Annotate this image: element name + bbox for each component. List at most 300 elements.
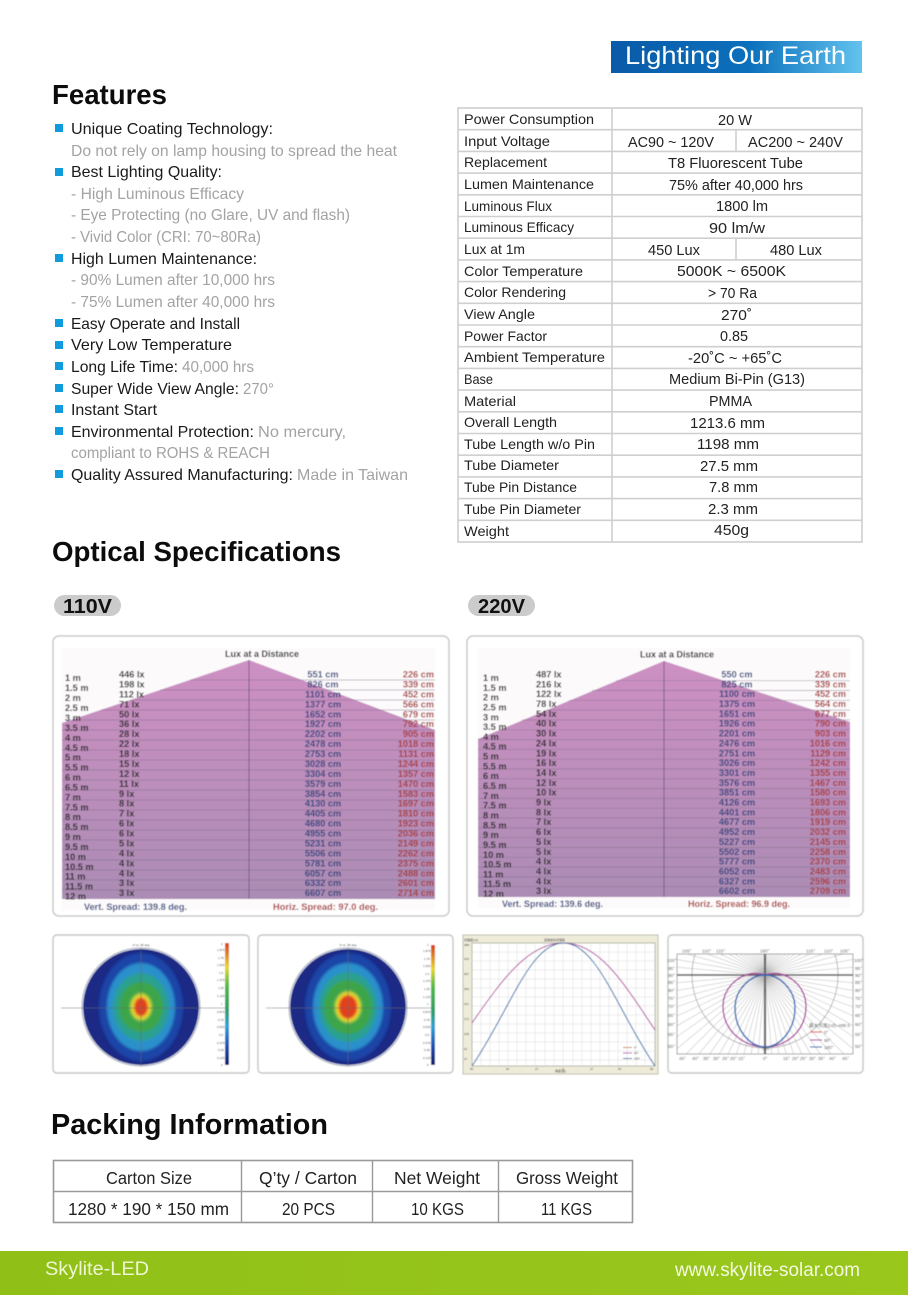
panel: 220V lux at a distance chart: 564 cm [815,699,846,709]
panel: 110V false-colour illuminance map: 0.75 [218,1018,224,1022]
table values: 27.5 mm [700,458,758,475]
table row labels: Input Voltage [464,133,550,149]
table values: 5000K ~ 6500K [677,263,786,280]
panel: 110V lux at a distance chart: 1357 cm [398,769,434,779]
panel: 110V lux at a distance chart: 12 m [65,892,86,902]
chart: polar light distribution diagram: 45° [679,1056,686,1061]
panel: 110V false-colour illuminance map: 1.375 [217,978,225,982]
table row labels: Power Consumption [464,111,594,127]
panel: 110V lux at a distance chart: 2714 cm [398,888,434,898]
chart: luminous intensity vs angle line chart: 51 [464,1047,468,1051]
panel: 220V lux at a distance chart: 1355 cm [810,768,846,778]
panel: 220V lux at a distance chart: 3.5 m [483,722,506,732]
panel: 220V lux at a distance chart: 5227 cm [719,837,755,847]
panel: features list: Made in Taiwan [297,467,408,484]
table values: Medium Bi-Pin (G13) [669,371,805,388]
panel: 110V lux at a distance chart: 3854 cm [305,789,341,799]
chart: polar light distribution diagram [666,934,864,1074]
panel: 220V lux at a distance chart: 4 lx [536,866,552,876]
table values: 270˚ [721,307,752,324]
panel: 110V false-colour illuminance map: 0.25 [218,1048,224,1052]
panel: 220V lux at a distance chart: 1693 cm [810,798,846,808]
table values: -20˚C ~ +65˚C [688,350,782,367]
chart: polar light distribution diagram: 50° [668,1044,675,1049]
chart: polar light distribution diagram: 105° [682,948,692,954]
legend: 90° [634,1051,639,1055]
panel: features list: Quality Assured Manufacturing: [71,467,293,484]
panel: 220V false-colour illuminance map: 2 [427,943,429,947]
chart: polar light distribution diagram: 80° [668,988,675,993]
table values: 480 Lux [770,242,822,259]
panel: 220V false-colour illuminance map: 0.5 [425,1033,430,1037]
panel: 110V lux at a distance chart: 3 lx [119,888,135,898]
table row labels: Luminous Flux [464,198,552,214]
chart: polar light distribution diagram: 180° [760,948,770,954]
panel: 110V lux at a distance chart: 1 m [65,673,81,683]
table values: 75% after 40,000 hrs [669,177,803,194]
table values [628,112,843,539]
panel: 220V false-colour illuminance map: D vs. 90 deg [340,943,357,947]
panel: 110V false-colour illuminance map: 2 [221,942,223,946]
polar legend: 最大光度(cd)=488.5 [809,1022,850,1029]
chart: polar light distribution diagram: 70° [668,1004,675,1009]
panel: 220V lux at a distance chart: 2596 cm [810,876,846,886]
table row labels: Tube Diameter [464,457,559,473]
panel: 220V lux at a distance chart: 12 lx [536,778,557,788]
panel: 220V lux at a distance chart: 6327 cm [719,876,755,886]
panel: 220V lux at a distance chart: 10.5 m [483,860,512,870]
panel: 110V false-colour illuminance map: 1.25 [218,986,224,990]
chart: polar light distribution diagram: 35° [818,1056,825,1061]
chart: luminous intensity vs angle line chart: 221 [464,1002,469,1006]
panel: 220V lux at a distance chart: 2201 cm [719,729,755,739]
chart: polar light distribution diagram: 85° [855,980,862,985]
panel: 110V lux at a distance chart: 71 lx [119,699,140,709]
panel: 220V lux at a distance chart: 30 lx [536,729,557,739]
panel: 110V lux at a distance chart: 1.5 m [65,683,88,693]
table values: AC200 ~ 240V [748,134,843,151]
panel: 110V lux at a distance chart: 2202 cm [305,729,341,739]
panel: 110V lux at a distance chart: 8.5 m [65,822,88,832]
chart: polar light distribution diagram: 110° [824,948,833,954]
chart: polar light distribution diagram: 90° [855,973,862,978]
panel: 220V lux at a distance chart: 1651 cm [719,709,755,719]
panel: 110V lux at a distance chart: 4.5 m [65,743,88,753]
panel: 110V lux at a distance chart: 8 m [65,812,81,822]
panel: 110V lux at a distance chart: 2262 cm [398,848,434,858]
panel: 220V lux at a distance chart: 550 cm [721,670,753,680]
panel: 110V lux at a distance chart: 452 cm [403,689,434,699]
panel: 220V lux at a distance chart: 216 lx [536,679,562,689]
panel: 220V lux at a distance chart: 1926 cm [719,719,755,729]
panel: 110V lux at a distance chart: 3.5 m [65,723,88,733]
footer bar [0,1251,908,1295]
pill label: 110V: 110V [63,596,113,618]
chart: polar light distribution diagram: 50° [855,1044,862,1049]
panel: packing table: Carton Size [106,1168,192,1188]
panel: 110V lux at a distance chart: 3028 cm [305,759,341,769]
chart: polar light distribution diagram: 65° [668,1013,675,1018]
panel: 110V lux at a distance chart: 198 lx [119,679,145,689]
table row labels: Luminous Efficacy [464,219,574,235]
panel: 110V lux at a distance chart: 4 lx [119,848,135,858]
panel: packing table: 10 KGS [411,1199,464,1219]
panel: 220V lux at a distance chart: 4952 cm [719,827,755,837]
panel: 220V lux at a distance chart: 790 cm [815,719,846,729]
panel: 110V lux at a distance chart: 9.5 m [65,842,88,852]
table values: AC90 ~ 120V [628,134,714,151]
chart: luminous intensity vs angle line chart: 100 [464,1032,469,1036]
polar legend: 180° [824,1045,834,1050]
panel: 110V lux at a distance chart: 7.5 m [65,802,88,812]
panel: 110V false-colour illuminance map: 0.375 [217,1041,225,1045]
panel: 220V lux at a distance chart: 9 lx [536,798,552,808]
panel: 110V lux at a distance chart: 566 cm [403,699,434,709]
panel: 220V false-colour illuminance map: 1.375 [423,979,431,983]
panel: 110V lux at a distance chart: 10.5 m [65,862,94,872]
panel: 220V lux at a distance chart: 5777 cm [719,857,755,867]
panel: features list: - Vivid Color (CRI: 70~80Ra) [71,229,261,246]
panel: 110V lux at a distance chart: 826 cm [307,679,339,689]
table values: 450g [714,522,749,539]
panel: features list: - High Luminous Efficacy [71,186,244,203]
panel: features list: Do not rely on lamp housing to spread the heat [71,143,398,160]
panel: 110V lux at a distance chart: Vert. Spread: 139.8 deg. [84,902,187,912]
panel: 220V lux at a distance chart: 19 lx [536,748,557,758]
panel: 220V lux at a distance chart: 487 lx [536,670,562,680]
panel: 220V false-colour illuminance map: 0.875 [423,1010,431,1014]
panel: 220V lux at a distance chart: 2258 cm [810,847,846,857]
panel: 220V lux at a distance chart: 4126 cm [719,798,755,808]
table row labels: Ambient Temperature [464,349,605,365]
panel: 220V false-colour illuminance map: 1.75 [424,957,430,961]
panel: 220V lux at a distance chart: 10 m [483,850,504,860]
panel: 110V lux at a distance chart: 1652 cm [305,709,341,719]
panel: 220V lux at a distance chart: 9 m [483,830,499,840]
panel: 110V lux at a distance chart: 1101 cm [305,689,341,699]
panel: 110V false-colour illuminance map: 0.5 [219,1033,224,1037]
table row labels: Lux at 1m [464,241,525,257]
panel: features list: High Lumen Maintenance: [71,251,257,268]
panel: 110V lux at a distance chart: 11 lx [119,779,140,789]
panel: 220V lux at a distance chart: 2751 cm [719,748,755,758]
panel: 110V lux at a distance chart: 2478 cm [305,739,341,749]
panel: 220V lux at a distance chart: 8 m [483,810,499,820]
panel: 110V lux at a distance chart: 1583 cm [398,789,434,799]
panel: 110V false-colour illuminance map: 0.875 [217,1010,225,1014]
chart: luminous intensity vs angle line chart: 416 [464,957,469,961]
panel: 220V lux at a distance chart: 452 cm [815,689,846,699]
table values: 90 lm/w [709,220,765,237]
panel: 220V lux at a distance chart: 4401 cm [719,807,755,817]
panel: 110V lux at a distance chart: 551 cm [307,670,339,680]
legend [623,1046,641,1060]
panel: packing table: 1280 * 190 * 150 mm [68,1199,229,1219]
chart: polar light distribution diagram: 60° [855,1022,862,1027]
chart: polar light distribution diagram: 40° [692,1056,699,1061]
table row labels: Tube Pin Distance [464,479,577,495]
chart: polar light distribution diagram: 0° [763,1056,768,1061]
panel: features list [55,121,408,484]
panel: 110V lux at a distance chart: 6 lx [119,819,135,829]
table row labels: Lumen Maintenance [464,176,594,192]
panel: 220V lux at a distance chart: 226 cm [815,670,846,680]
panel: 220V lux at a distance chart: 7.5 m [483,801,506,811]
panel: 110V false-colour illuminance map: 1.625 [217,963,225,967]
panel: 110V lux at a distance chart: 2753 cm [305,749,341,759]
panel: 220V lux at a distance chart: Lux at a Distance [640,650,714,660]
panel: features list: Long Life Time: [71,359,178,376]
panel: 220V lux at a distance chart: 54 lx [536,709,557,719]
chart: polar light distribution diagram: 75° [668,996,675,1001]
panel: 220V lux at a distance chart: 4 m [483,732,499,742]
panel: 110V lux at a distance chart: 4680 cm [305,819,341,829]
panel: features list: 270° [243,381,274,398]
heading: Features: Features [52,79,167,110]
chart: polar light distribution diagram: 105° [840,948,850,954]
pill label: 220V: 220V [478,596,526,618]
polar legend: 90° [824,1038,831,1043]
panel: 220V false-colour illuminance map: 0.25 [424,1048,430,1052]
chart: luminous intensity vs angle line chart: 直角坐标光强度 [544,937,565,942]
panel: 110V lux at a distance chart: 112 lx [119,689,145,699]
panel: 110V false-colour illuminance map: 0.125 [217,1056,225,1060]
panel: 220V false-colour illuminance map: 0.375 [423,1041,431,1045]
panel: 220V lux at a distance chart: 1467 cm [810,778,846,788]
panel: 220V false-colour illuminance map [258,935,453,1073]
panel: 220V lux at a distance chart: 3 m [483,712,499,722]
panel: 220V false-colour illuminance map: 1.5 [425,972,430,976]
panel: 110V lux at a distance chart: 6 lx [119,828,135,838]
panel: 110V lux at a distance chart: 3 m [65,713,81,723]
panel: 110V lux at a distance chart: 1697 cm [398,799,434,809]
panel: 110V lux at a distance chart: 28 lx [119,729,140,739]
panel: 110V lux at a distance chart: 6.5 m [65,782,88,792]
footer bar: www.skylite-solar.com [674,1260,860,1281]
chart: luminous intensity vs angle line chart: 27 [464,1057,468,1061]
table values: 0.85 [720,328,748,345]
panel: 110V lux at a distance chart: 6 m [65,772,81,782]
panel: 110V lux at a distance chart: 9 lx [119,789,135,799]
panel: 110V lux at a distance chart: 7 lx [119,809,135,819]
panel: 220V lux at a distance chart: 4.5 m [483,742,506,752]
chart: polar light distribution diagram: 90° [668,973,675,978]
chart: polar light distribution diagram: 100° [667,958,677,963]
chart: luminous intensity vs angle line chart: 90 [470,1067,474,1071]
panel: 220V lux at a distance chart: 8 lx [536,807,552,817]
table row labels: Overall Length [464,414,557,430]
panel: 110V lux at a distance chart: 18 lx [119,749,140,759]
panel: 110V lux at a distance chart: 6057 cm [305,868,341,878]
chart: polar light distribution diagram: 95° [668,966,675,971]
panel: packing table: 11 KGS [541,1199,592,1219]
panel: 110V lux at a distance chart: 4130 cm [305,799,341,809]
panel: 220V lux at a distance chart: 16 lx [536,758,557,768]
table values: 20 W [718,112,753,129]
panel: specification table [458,108,862,542]
panel: 110V lux at a distance chart: 5781 cm [305,858,341,868]
panel: 220V lux at a distance chart: 2032 cm [810,827,846,837]
panel: 110V lux at a distance chart: 2488 cm [398,868,434,878]
panel: 110V lux at a distance chart: 1810 cm [398,809,434,819]
table values: 1213.6 mm [690,415,765,432]
table values: 2.3 mm [708,501,758,518]
panel: 110V lux at a distance chart: 3304 cm [305,769,341,779]
panel: 110V lux at a distance chart: 5506 cm [305,848,341,858]
chart: polar light distribution diagram: 20° [730,1056,737,1061]
panel: 220V lux at a distance chart: 825 cm [721,679,753,689]
panel: 110V lux at a distance chart [53,636,449,916]
chart: luminous intensity vs angle line chart: 367 [464,972,469,976]
panel: 220V lux at a distance chart: 78 lx [536,699,557,709]
panel: 110V false-colour illuminance map: 0 [221,1063,223,1067]
panel: 220V lux at a distance chart [467,636,863,916]
panel: 110V lux at a distance chart: 1131 cm [398,749,434,759]
panel: 220V false-colour illuminance map: 1.25 [424,987,430,991]
panel: 110V lux at a distance chart: Horiz. Spread: 97.0 deg. [273,902,378,912]
panel: features list: Best Lighting Quality: [71,164,222,181]
panel: 110V lux at a distance chart: 4955 cm [305,828,341,838]
panel: 220V lux at a distance chart: 6 lx [536,827,552,837]
panel: 220V false-colour illuminance map: 1 [427,1002,429,1006]
panel: 220V lux at a distance chart: 5 m [483,752,499,762]
panel: 110V lux at a distance chart: 2375 cm [398,858,434,868]
panel: features list: 40,000 hrs [182,359,254,376]
panel: 110V lux at a distance chart: 9 m [65,832,81,842]
table row labels: Power Factor [464,328,547,344]
panel: 220V lux at a distance chart: 1129 cm [810,748,846,758]
panel: 110V lux at a distance chart: 5231 cm [305,838,341,848]
panel: 220V lux at a distance chart: 1 m [483,673,499,683]
panel: 110V lux at a distance chart: 1927 cm [305,719,341,729]
panel: 220V lux at a distance chart: 903 cm [815,729,846,739]
panel: 110V lux at a distance chart: 2036 cm [398,828,434,838]
legend: 0° [634,1046,638,1050]
chart: polar light distribution diagram: 500 [762,1046,770,1051]
panel: 110V lux at a distance chart: 4 m [65,733,81,743]
panel: features list: - 90% Lumen after 10,000 hrs [71,272,275,289]
panel: 220V lux at a distance chart: Vert. Spread: 139.6 deg. [502,899,603,909]
chart: luminous intensity vs angle line chart [463,935,658,1074]
chart: polar light distribution diagram: 70° [855,1004,862,1009]
chart: polar light distribution diagram: 95° [855,966,862,971]
chart: polar light distribution diagram: 55° [855,1032,862,1037]
table row labels: Color Temperature [464,263,583,279]
panel: packing table: Q’ty / Carton [259,1168,357,1188]
heading: Optical Specifications: Optical Specifications [52,536,341,567]
chart: polar light distribution diagram: 65° [855,1013,862,1018]
chart: luminous intensity vs angle line chart: 294 [464,987,469,991]
panel: 220V lux at a distance chart: 2145 cm [810,837,846,847]
panel: 110V lux at a distance chart: 8 lx [119,799,135,809]
chart: luminous intensity vs angle line chart: 27 [590,1067,594,1071]
panel: 110V lux at a distance chart: 1470 cm [398,779,434,789]
chart: luminous intensity vs angle line chart: 172 [464,1017,469,1021]
panel: 220V lux at a distance chart: 2709 cm [810,886,846,896]
panel: 220V lux at a distance chart: 12 m [483,889,504,899]
panel: 220V lux at a distance chart: 1016 cm [810,738,846,748]
panel: 220V lux at a distance chart: 3 lx [536,886,552,896]
panel: 220V lux at a distance chart: 1375 cm [719,699,755,709]
panel: 220V lux at a distance chart: 14 lx [536,768,557,778]
panel: 110V lux at a distance chart: 50 lx [119,709,140,719]
panel: 220V lux at a distance chart: 11.5 m [483,879,511,889]
panel: 110V lux at a distance chart: 5 m [65,752,81,762]
panel: 220V lux at a distance chart: 4 lx [536,857,552,867]
panel: 110V lux at a distance chart: 6332 cm [305,878,341,888]
chart: luminous intensity vs angle line chart: 光强度(cd) [464,937,478,942]
panel: features list: compliant to ROHS & REACH [71,445,270,462]
panel: 220V false-colour illuminance map: 1.125 [423,995,431,999]
panel: 220V lux at a distance chart: 3851 cm [719,788,755,798]
panel: 220V lux at a distance chart: 24 lx [536,738,557,748]
panel: 220V false-colour illuminance map: 1.875 [423,949,431,953]
panel: 110V lux at a distance chart: 5.5 m [65,762,88,772]
panel: 220V lux at a distance chart: 2483 cm [810,866,846,876]
panel: 110V lux at a distance chart: 1018 cm [398,739,434,749]
panel: 110V false-colour illuminance map [53,935,249,1073]
footer bar: Skylite-LED [45,1259,149,1280]
panel: 110V false-colour illuminance map: 1.5 [219,971,224,975]
panel: 220V lux at a distance chart: 1806 cm [810,807,846,817]
panel: features list: No mercury, [258,424,346,441]
table row labels: Tube Length w/o Pin [464,436,595,452]
chart: luminous intensity vs angle line chart: 488 [464,943,469,947]
chart: polar light distribution diagram: 30° [809,1056,816,1061]
panel: 220V lux at a distance chart: 3026 cm [719,758,755,768]
polar legend: 0° [824,1030,829,1035]
panel: 110V lux at a distance chart: 2601 cm [398,878,434,888]
table row labels: Weight [464,523,509,539]
chart: polar light distribution diagram: 115° [806,948,815,954]
panel: 110V lux at a distance chart: 7 m [65,792,81,802]
panel: features list: Very Low Temperature [71,337,232,354]
panel: 110V false-colour illuminance map: D vs. 90 deg [133,943,150,947]
panel: 110V lux at a distance chart: Lux at a Distance [225,649,299,660]
pill label: 220V [468,595,535,618]
table values: PMMA [709,393,752,410]
panel: 220V lux at a distance chart: 3301 cm [719,768,755,778]
table row labels: Color Rendering [464,284,566,300]
panel: 220V lux at a distance chart: 2 m [483,693,499,703]
panel: 110V lux at a distance chart: 5 lx [119,838,135,848]
panel: 220V lux at a distance chart: 11 m [483,869,503,879]
panel: 220V false-colour illuminance map: 0 [427,1063,429,1067]
table row labels: Tube Pin Diameter [464,501,581,517]
panel: 220V lux at a distance chart: 6052 cm [719,866,755,876]
panel: 110V lux at a distance chart: 4405 cm [305,809,341,819]
pill label: 110V [54,595,121,618]
panel: 110V lux at a distance chart: 905 cm [403,729,434,739]
panel: features list: Instant Start [71,402,158,419]
panel: features list: Super Wide View Angle: [71,381,239,398]
table values: 450 Lux [648,242,700,259]
chart: polar light distribution diagram: 85° [668,980,675,985]
table values: 7.8 mm [709,479,758,496]
panel: 110V lux at a distance chart: 10 m [65,852,86,862]
panel: 220V lux at a distance chart: 10 lx [536,788,557,798]
panel: 110V lux at a distance chart: 22 lx [119,739,140,749]
panel: 220V false-colour illuminance map: 1.625 [423,964,431,968]
panel: 220V lux at a distance chart: 6602 cm [719,886,755,896]
panel: 110V lux at a distance chart: 679 cm [403,709,434,719]
chart: polar light distribution diagram: 55° [668,1032,675,1037]
panel: 110V lux at a distance chart: 2.5 m [65,703,88,713]
panel: 110V false-colour illuminance map: 1.75 [218,956,224,960]
panel: 220V lux at a distance chart: 5 lx [536,837,552,847]
panel: 110V lux at a distance chart: 446 lx [119,670,145,680]
panel: 110V lux at a distance chart: 339 cm [403,679,434,689]
